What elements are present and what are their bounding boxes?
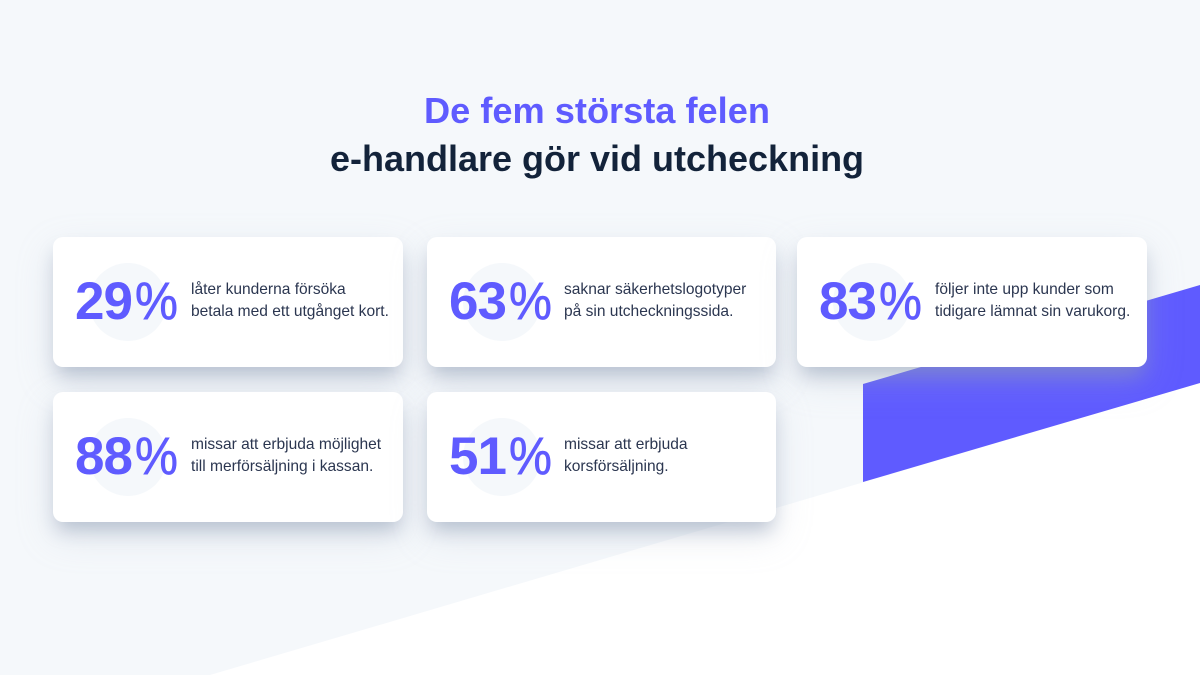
stat: 51%: % xyxy=(509,427,552,486)
stat: 29% xyxy=(75,272,178,331)
description: 29% xyxy=(191,281,389,320)
description: 29%: låter kunderna försöka xyxy=(191,281,346,298)
stat: 83%: 83 xyxy=(819,272,876,331)
description: 88% xyxy=(191,436,381,475)
stat: 88%: % xyxy=(135,427,178,486)
description: 63%: saknar säkerhetslogotyper xyxy=(564,281,746,298)
card: 51% xyxy=(427,392,776,522)
description: 63% xyxy=(564,281,746,320)
card: 83% xyxy=(797,237,1147,367)
description: 51%: missar att erbjuda xyxy=(564,436,688,453)
stat: 88%: 88 xyxy=(75,427,132,486)
stat: 83% xyxy=(819,272,922,331)
card: 29% xyxy=(53,237,403,367)
description: 83% xyxy=(935,281,1130,320)
description: 83%: följer inte upp kunder som xyxy=(935,281,1114,298)
card: 63% xyxy=(427,237,776,367)
stat: 88% xyxy=(75,427,178,486)
stat: 29%: 29 xyxy=(75,272,132,331)
description: 51% xyxy=(564,436,688,475)
stat: 51% xyxy=(449,427,552,486)
description: 88%: missar att erbjuda möjlighet xyxy=(191,436,381,453)
stat: 29%: % xyxy=(135,272,178,331)
stat: 83%: % xyxy=(879,272,922,331)
title xyxy=(330,90,864,179)
description: 29%: betala med ett utgånget kort. xyxy=(191,303,389,320)
description: 83%: tidigare lämnat sin varukorg. xyxy=(935,303,1130,320)
stat: 63%: % xyxy=(509,272,552,331)
stat: 63% xyxy=(449,272,552,331)
description: 63%: på sin utcheckningssida. xyxy=(564,303,733,320)
title line 2: e-handlare gör vid utcheckning xyxy=(330,138,864,179)
stat: 51%: 51 xyxy=(449,427,506,486)
title line 1: De fem största felen xyxy=(424,90,770,131)
card: 88% xyxy=(53,392,403,522)
description: 88%: till merförsäljning i kassan. xyxy=(191,458,373,475)
description: 51%: korsförsäljning. xyxy=(564,458,669,475)
stat: 63%: 63 xyxy=(449,272,506,331)
